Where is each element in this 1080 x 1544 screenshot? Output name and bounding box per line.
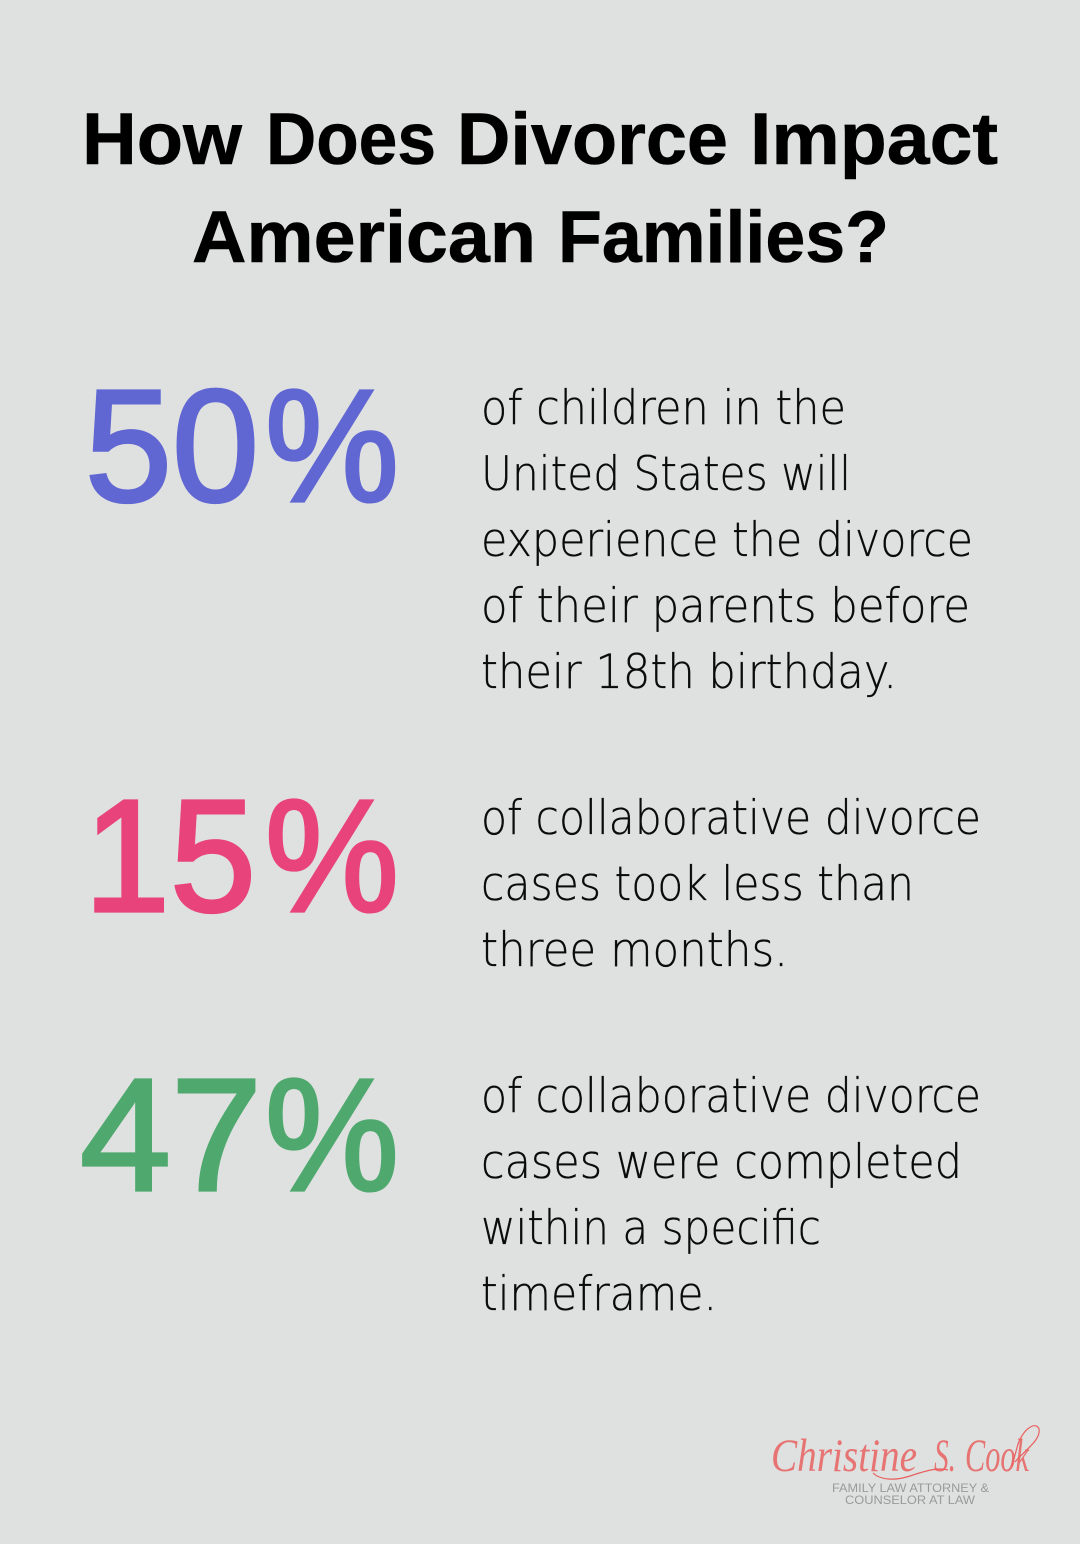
title [82, 99, 998, 278]
title: How [82, 99, 242, 180]
text: 15% description: three months. [481, 923, 788, 978]
text: 50% description: United States will [481, 447, 851, 502]
text: 50% description: of children in the [481, 381, 846, 436]
text: 47% description: cases were completed [481, 1135, 962, 1190]
logo: Christine S. Cook: S. [934, 1430, 956, 1482]
text: 47% description: timeframe. [481, 1267, 717, 1322]
stat: 15%: 15 [84, 766, 256, 945]
text: 50% description: of their parents before [481, 579, 970, 634]
text: 50% description: experience the divorce [481, 513, 973, 568]
stat: 15%: % [265, 766, 399, 945]
text: 50% description: their 18th birthday. [481, 645, 897, 700]
text: 50% description [481, 381, 973, 700]
text: 47% description: within a specific [481, 1201, 821, 1256]
title: Divorce [457, 99, 728, 180]
stat: 47%: 47 [80, 1045, 262, 1224]
stat: 50%: 50 [85, 356, 259, 535]
logo: Christine S. Cook: COUNSELOR AT LAW [845, 1495, 975, 1507]
stat: 15% [84, 766, 399, 945]
title: Does [266, 99, 436, 180]
stat: 47%: % [265, 1045, 399, 1224]
stat: 50% [85, 356, 399, 535]
logo: Christine S. Cook [771, 1426, 1039, 1507]
title: Families? [558, 197, 889, 278]
logo: Christine S. Cook: Christine [771, 1430, 917, 1482]
logo: Christine S. Cook: Cook [965, 1430, 1030, 1482]
text: 15% description [481, 791, 981, 978]
text: 15% description: of collaborative divorce [481, 791, 981, 846]
title: American [192, 197, 536, 278]
stat: 47% [80, 1045, 399, 1224]
text: 47% description [481, 1069, 981, 1322]
stat: 50%: % [265, 356, 399, 535]
text: 15% description: cases took less than [481, 857, 914, 912]
logo: Christine S. Cook: FAMILY LAW ATTORNEY & [832, 1483, 989, 1495]
text: 47% description: of collaborative divorce [481, 1069, 981, 1124]
title: Impact [750, 99, 998, 180]
